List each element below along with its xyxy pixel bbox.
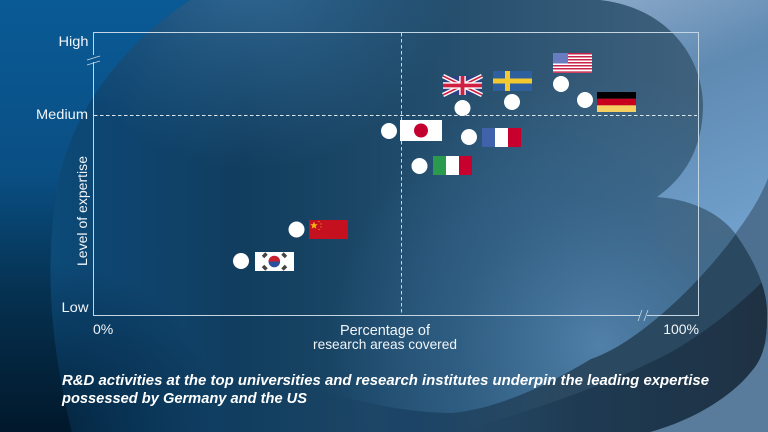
background: right swoosh <box>500 178 768 432</box>
flag: Sweden <box>493 71 532 91</box>
x label: 100%: 100% <box>663 321 699 337</box>
flag: UK <box>443 76 482 95</box>
y label: medium: Medium <box>36 106 88 122</box>
caption <box>61 372 709 407</box>
y label: high: High <box>58 33 88 49</box>
axis labels: research areas covered <box>313 336 457 352</box>
flag: USA <box>553 53 592 73</box>
chart frame <box>87 32 698 321</box>
flag: China <box>309 220 348 239</box>
caption: possessed by Germany and the US <box>61 390 307 407</box>
data points <box>233 76 593 269</box>
midpoint dashed gridline <box>400 33 402 315</box>
flag: Germany <box>597 92 636 112</box>
background: darkest inner band <box>540 282 767 432</box>
flag: France <box>482 128 521 147</box>
caption: R&D activities at the top universities and research institutes underpin the leading expertise <box>62 372 709 389</box>
y axis title: Level of expertise <box>75 156 90 266</box>
x axis title: Percentage of <box>340 323 431 339</box>
y label: low: Low <box>62 299 89 315</box>
x label: 0%: 0% <box>93 321 113 337</box>
flag: South Korea <box>255 252 294 271</box>
background: dark overlap band <box>372 234 767 432</box>
medium dashed gridline <box>94 114 697 116</box>
axis labels <box>36 33 699 352</box>
flag: Italy <box>433 156 472 175</box>
flag: Japan <box>400 120 442 141</box>
